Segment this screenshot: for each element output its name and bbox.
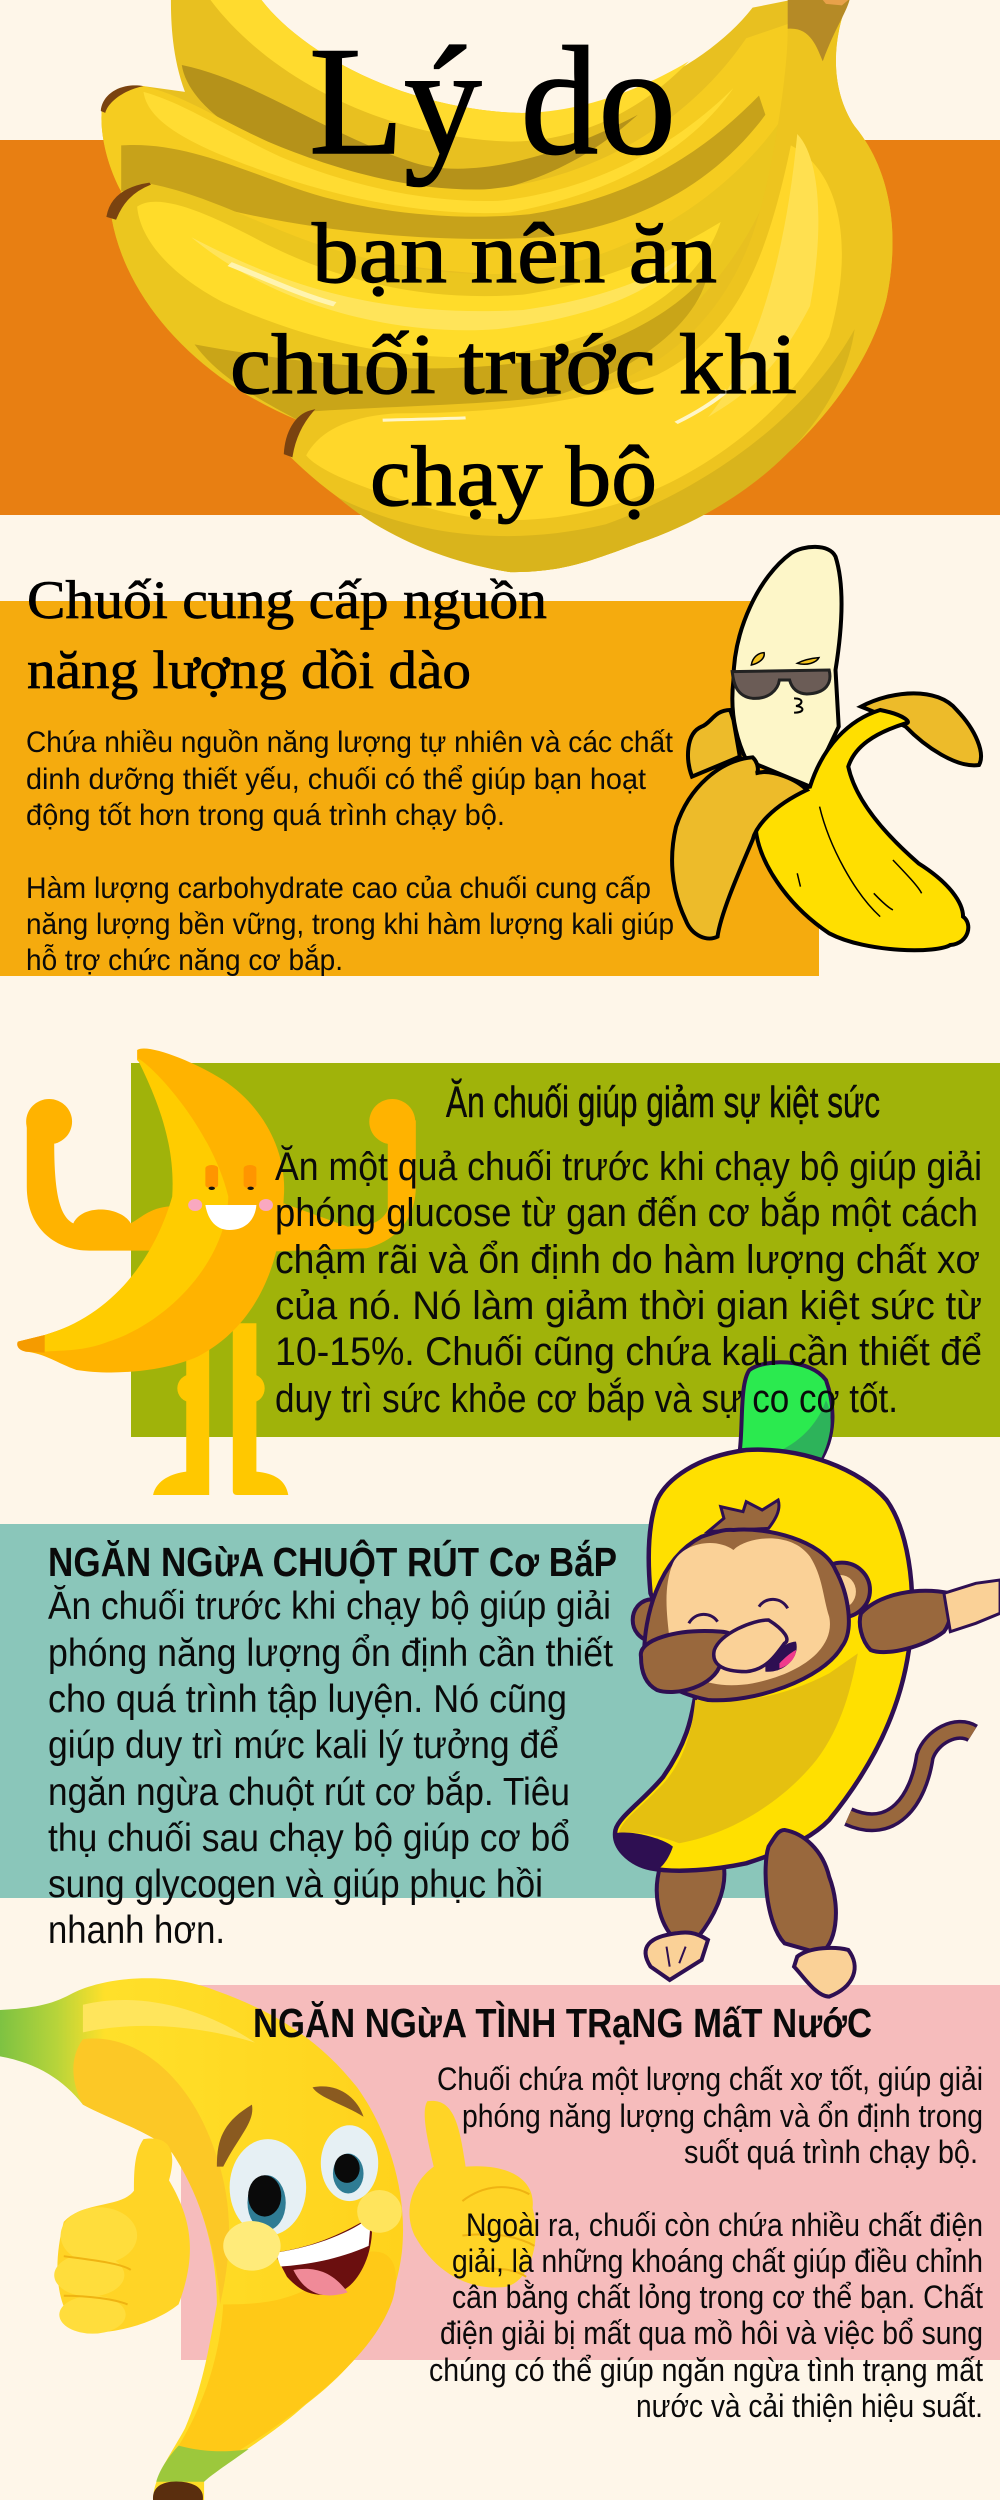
mouth: [765, 1642, 797, 1672]
face: [205, 1165, 218, 1188]
text block: cramps: nhanh hơn.: [48, 1909, 225, 1952]
icon: smiling banana with thumbs up: [0, 1978, 536, 2500]
left hand: [57, 2138, 190, 2333]
text block: fatigue: của nó. Nó làm giảm thời gian kiệt sức từ: [275, 1284, 982, 1328]
heading: energy: [27, 570, 547, 700]
hand: [688, 710, 740, 777]
heading: energy: Chuối cung cấp nguồn: [27, 570, 547, 630]
text block: energy: động tốt hơn trong quá trình chạy bộ.: [26, 799, 505, 832]
text block: fatigue: [275, 1144, 982, 1421]
left leg: [657, 1867, 724, 1940]
cheeks: [223, 2221, 281, 2271]
text block: energy: Hàm lượng carbohydrate cao của chuối cung cấp: [26, 872, 651, 905]
text block: energy: năng lượng bền vững, trong khi hàm lượng kali giúp: [26, 908, 674, 941]
panel: fatigue green background: [131, 1063, 1000, 1437]
title: Lý do: [309, 15, 676, 187]
body: [0, 1978, 403, 2500]
flesh: [732, 547, 842, 787]
banana body: [18, 1049, 284, 1372]
right leg: [766, 1830, 836, 1953]
title: bạn nên ăn: [312, 205, 717, 301]
icon: peeled banana with sunglasses: [672, 547, 981, 950]
eyes: [689, 1599, 788, 1623]
panel: title orange band: [0, 140, 1000, 515]
text block: cramps: ngăn ngừa chuột rút cơ bắp. Tiêu: [48, 1771, 570, 1814]
text block: cramps: phóng năng lượng ổn định cần thiết: [48, 1632, 613, 1675]
heading: energy: năng lượng dồi dào: [27, 640, 471, 700]
panel: energy gold background: [0, 601, 819, 976]
stem: [740, 1362, 832, 1462]
legs: [153, 1323, 288, 1495]
tail: [848, 1730, 973, 1822]
sunglasses: [732, 670, 830, 698]
text block: energy: [26, 726, 674, 977]
front peel: [756, 710, 968, 950]
icon: monkey in banana costume: [615, 1362, 1000, 1997]
right arm: [860, 1591, 952, 1652]
text block: cramps: cho quá trình tập luyện. Nó cũng: [48, 1678, 567, 1721]
text block: dehydration: suốt quá trình chạy bộ.: [684, 2134, 978, 2170]
left peel: [672, 757, 807, 938]
text block: cramps: [48, 1585, 613, 1952]
head: [644, 1529, 849, 1700]
icon: banana bunch: [101, 0, 893, 572]
eyes: [230, 2139, 306, 2236]
brows: [217, 2086, 364, 2167]
mouth: [794, 698, 802, 713]
heading: dehydration: NGĂN NGừA TÌNH TRạNG MấT NướC: [253, 2000, 872, 2046]
banana suit: [615, 1450, 912, 1871]
text block: dehydration: [429, 2061, 983, 2424]
text block: energy: dinh dưỡng thiết yếu, chuối có thể giúp bạn hoạt: [26, 763, 647, 796]
text block: cramps: thụ chuối sau chạy bộ giúp cơ bổ: [48, 1817, 570, 1860]
panel: cramps teal background: [0, 1524, 772, 1898]
peel back right: [861, 693, 981, 765]
text block: fatigue: duy trì sức khỏe cơ bắp và sự co cơ tốt.: [275, 1376, 898, 1421]
text block: cramps: sung glycogen và giúp phục hồi: [48, 1863, 543, 1906]
text block: cramps: Ăn chuối trước khi chạy bộ giúp giải: [48, 1585, 611, 1628]
text block: energy: hỗ trợ chức năng cơ bắp.: [26, 944, 343, 977]
heading: cramps: NGĂN NGừA CHUỘT RÚT Cơ BắP: [48, 1539, 617, 1585]
mouth: [274, 2217, 372, 2295]
icon: strong flexing banana: [17, 1049, 416, 1495]
eyebrows: [751, 653, 819, 665]
title: chuối trước khi: [230, 316, 797, 412]
left arm: [27, 1120, 185, 1251]
panel: dehydration pink background: [181, 1985, 1000, 2360]
text block: energy: Chứa nhiều nguồn năng lượng tự nhiên và các chất: [26, 726, 674, 759]
title: chạy bộ: [370, 428, 657, 524]
right hand: [409, 2101, 536, 2288]
title: [230, 15, 797, 524]
ears: [633, 1599, 671, 1641]
arm across face: [641, 1631, 732, 1692]
hair: [708, 1500, 779, 1532]
right arm: [268, 1120, 416, 1252]
text block: cramps: giúp duy trì mức kali lý tưởng để: [48, 1724, 559, 1767]
